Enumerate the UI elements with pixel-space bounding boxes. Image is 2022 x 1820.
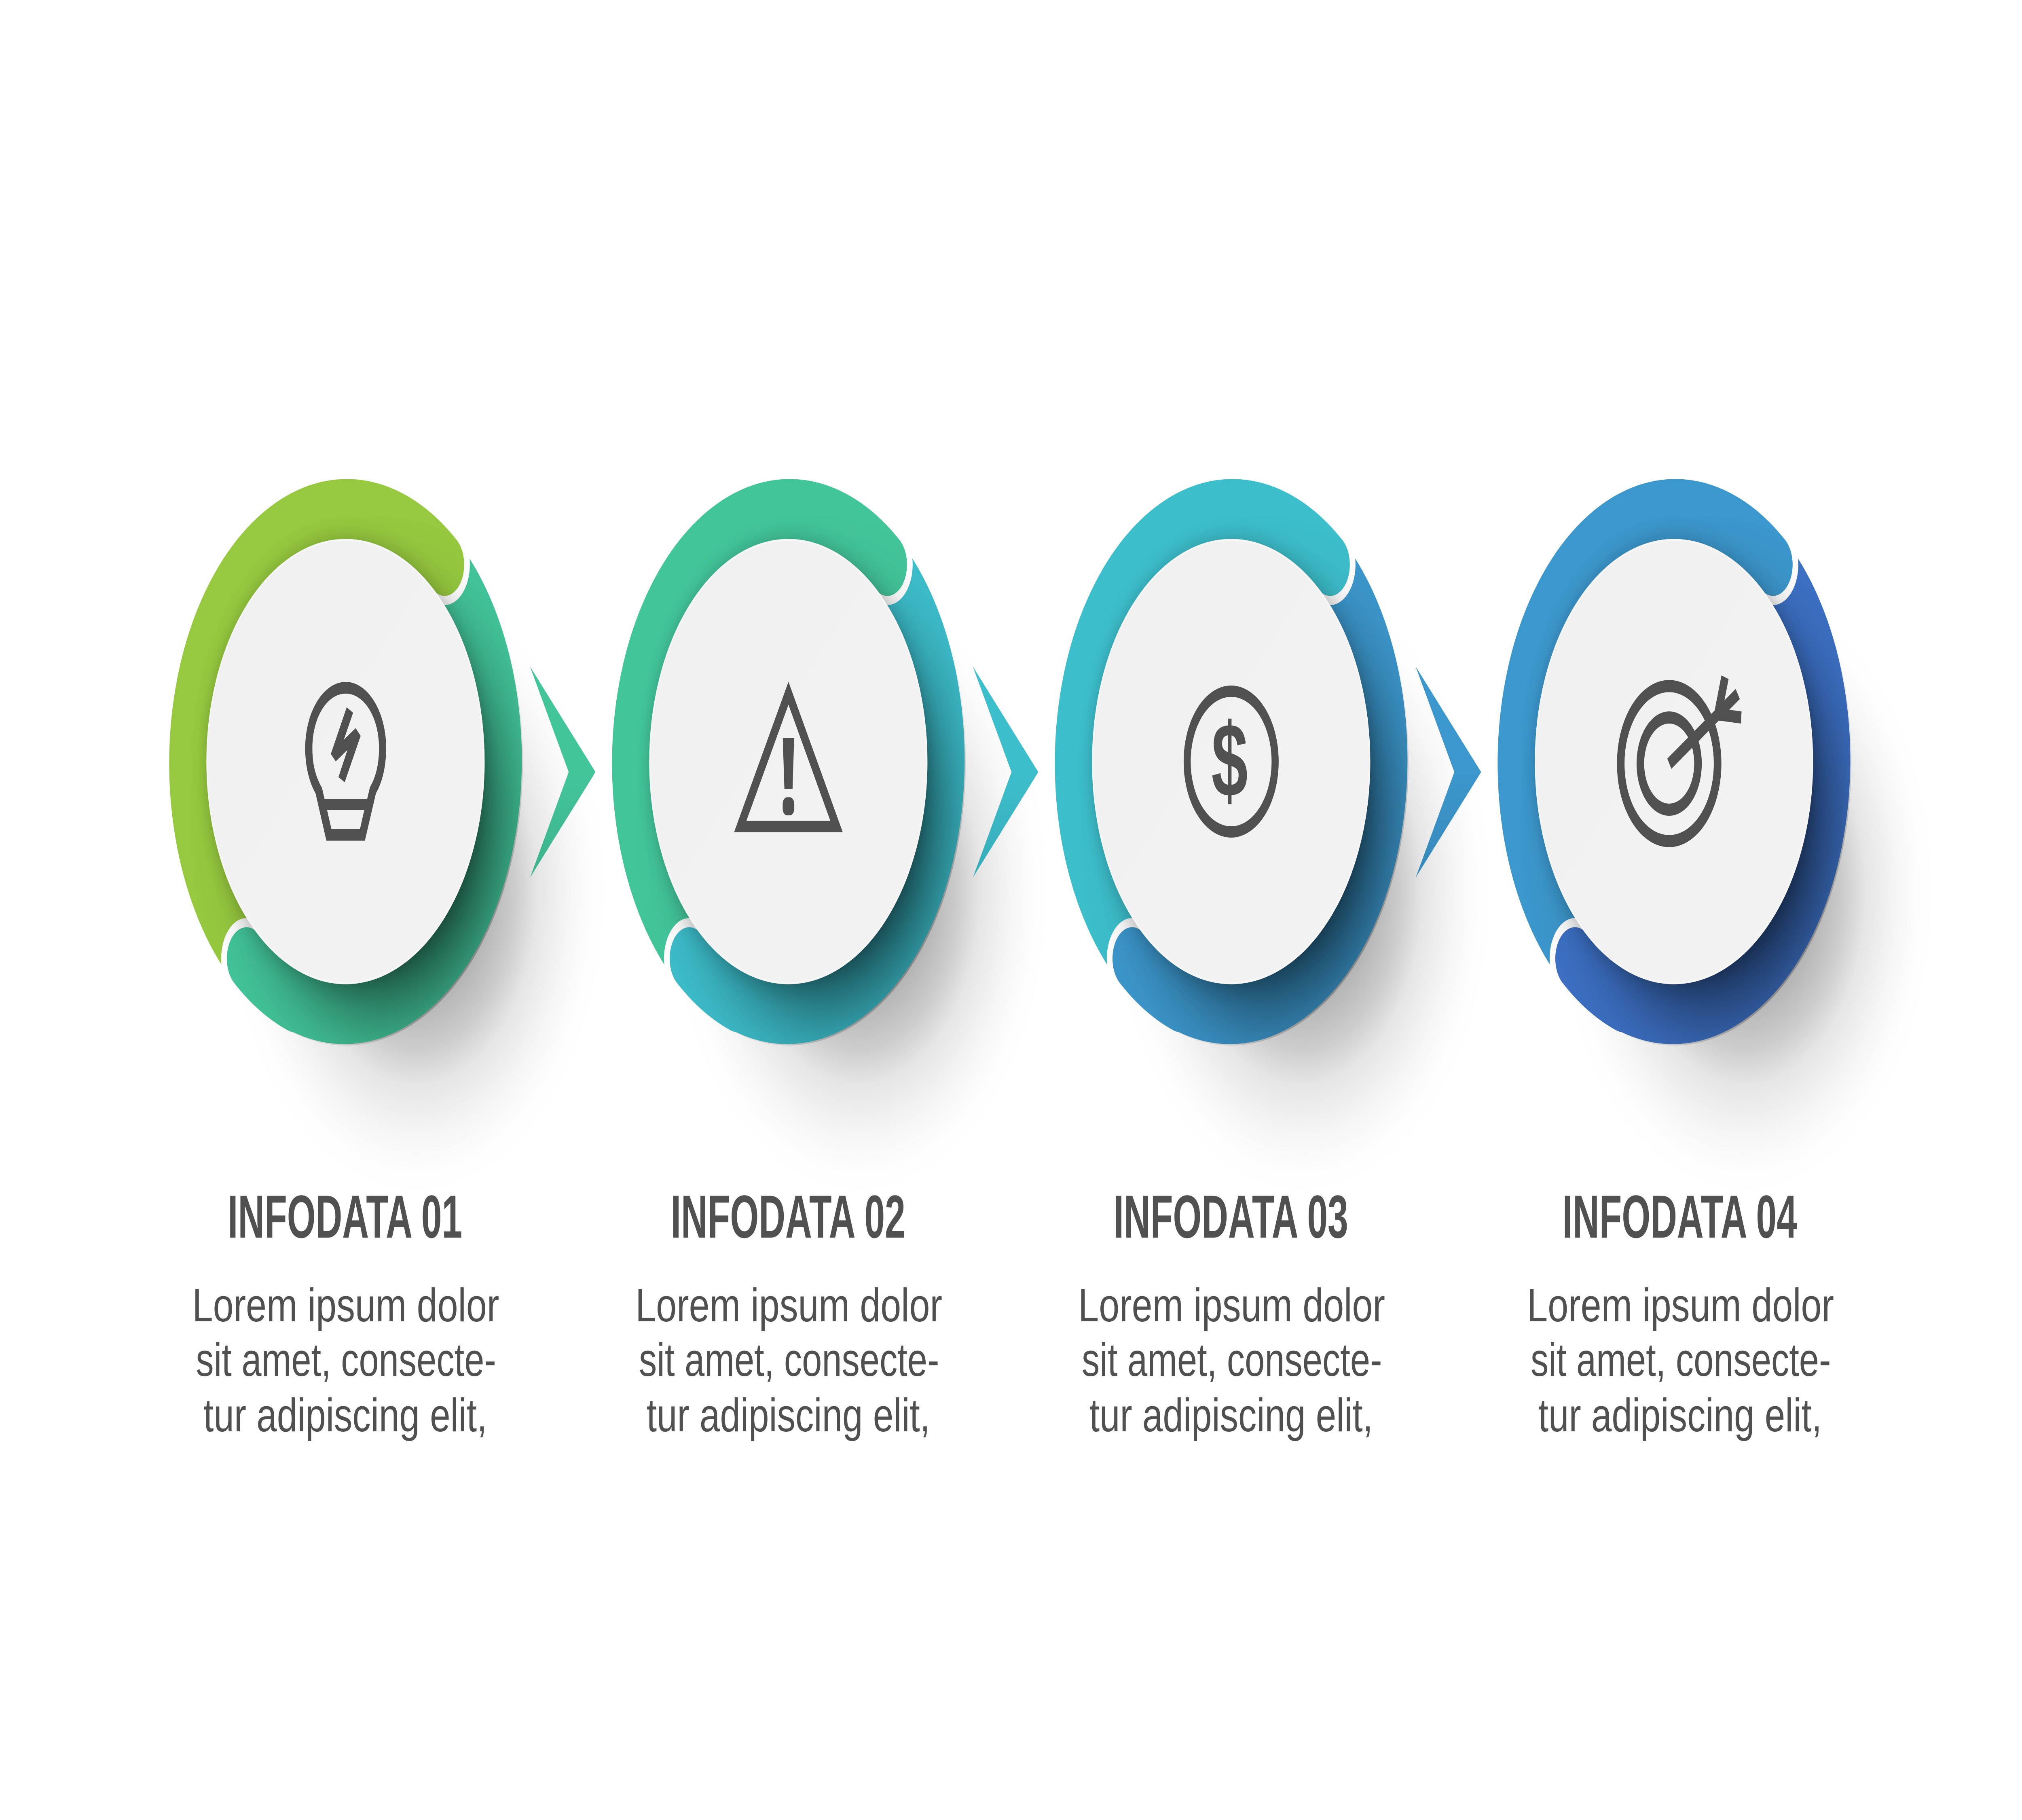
text block 3: Lorem ipsum dolor xyxy=(1078,1279,1385,1331)
text block 1: tur adipiscing elit, xyxy=(203,1389,487,1441)
heading: infodata 03: INFODATA 03 xyxy=(1114,1183,1348,1251)
icon: target with arrow xyxy=(1621,675,1742,841)
panel: step 1 circle xyxy=(189,510,608,1198)
ring arc: cyan lower xyxy=(689,565,945,1013)
icon: light bulb xyxy=(305,682,386,841)
panel: step 4 circle xyxy=(1517,510,1937,1198)
text block 2: tur adipiscing elit, xyxy=(647,1389,930,1441)
inner disc xyxy=(207,540,484,983)
text block 4: Lorem ipsum dolor xyxy=(1527,1279,1834,1331)
text block 2: Lorem ipsum dolor xyxy=(635,1279,942,1331)
text block 1 xyxy=(192,1279,499,1441)
icon: warning triangle xyxy=(734,682,843,832)
ring arc: deep blue lower xyxy=(1575,565,1831,1013)
ring arc: blue upper xyxy=(1517,510,1773,959)
heading: infodata 02: INFODATA 02 xyxy=(671,1183,905,1251)
drop shadow 4 xyxy=(1552,584,1937,1198)
ring arc: green upper xyxy=(189,510,444,959)
panel: step 2 circle xyxy=(632,510,1051,1198)
heading: infodata 04: INFODATA 04 xyxy=(1563,1183,1797,1251)
arrow 2 xyxy=(973,667,1038,878)
icon: dollar coin: $ xyxy=(1212,701,1248,819)
text block 1: Lorem ipsum dolor xyxy=(192,1279,499,1331)
ring end cap: deep blue xyxy=(1575,959,1623,1001)
ring arc: blue lower xyxy=(1132,565,1388,1013)
text block 2: sit amet, consecte- xyxy=(639,1334,939,1386)
drop shadow 3 xyxy=(1110,584,1494,1198)
drop shadow 2 xyxy=(667,584,1051,1198)
ring arc: teal lower xyxy=(246,565,502,1013)
text block 4: sit amet, consecte- xyxy=(1531,1334,1831,1386)
inner disc xyxy=(1536,540,1813,983)
text block 1: sit amet, consecte- xyxy=(196,1334,496,1386)
inner disc xyxy=(1093,540,1370,983)
ring arc: cyan upper xyxy=(1074,510,1330,959)
arrow 3 xyxy=(1416,667,1481,878)
ring end cap: cyan xyxy=(689,959,737,1001)
arrow 1 xyxy=(530,667,595,878)
ring end cap: blue xyxy=(1132,959,1180,1001)
text block 3: sit amet, consecte- xyxy=(1082,1334,1382,1386)
text block 4 xyxy=(1527,1279,1834,1441)
drop shadow 1 xyxy=(224,584,608,1198)
text block 2 xyxy=(635,1279,942,1441)
text block 4: tur adipiscing elit, xyxy=(1538,1389,1822,1441)
ring end cap: teal xyxy=(246,959,294,1001)
panel: step 3 circle xyxy=(1074,510,1494,1198)
inner disc xyxy=(650,540,927,983)
icon: dollar coin xyxy=(1187,691,1275,832)
text block 3: tur adipiscing elit, xyxy=(1089,1389,1373,1441)
ring arc: teal upper xyxy=(632,510,887,959)
text block 3 xyxy=(1078,1279,1385,1441)
heading: infodata 01: INFODATA 01 xyxy=(228,1183,462,1251)
